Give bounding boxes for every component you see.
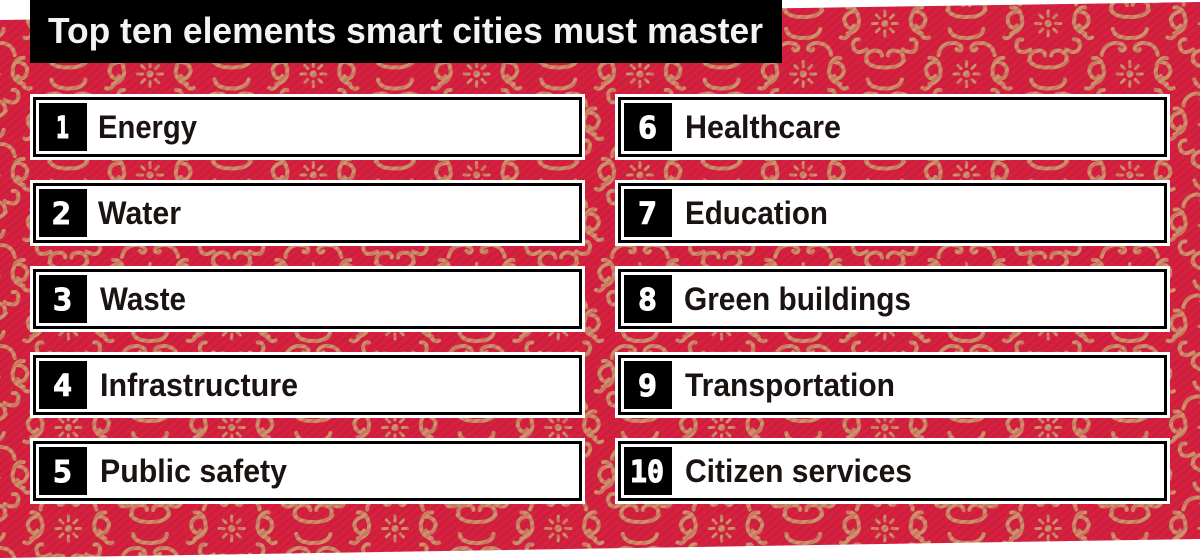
item 2: Water: Water	[98, 195, 181, 231]
item 2: Water: 2	[52, 197, 71, 232]
item 4: Infrastructure: Infrastructure	[100, 367, 298, 403]
title banner: Top ten elements smart cities must master	[48, 10, 763, 51]
item 3: Waste: Waste	[100, 281, 186, 317]
item 1: Energy: 1	[56, 111, 69, 146]
item 3: Waste	[30, 266, 585, 332]
item 8: Green buildings	[615, 266, 1170, 332]
item 4: Infrastructure: 4	[53, 369, 72, 404]
item 2: Water	[30, 180, 585, 246]
item 10: Citizen services	[615, 438, 1170, 504]
item 10: Citizen services: 10	[630, 455, 664, 490]
item 7: Education: Education	[685, 195, 828, 231]
item 4: Infrastructure	[30, 352, 585, 418]
item 10: Citizen services: Citizen services	[685, 453, 912, 489]
item 9: Transportation: 9	[638, 369, 657, 404]
item 6: Healthcare	[615, 94, 1170, 160]
item 6: Healthcare: 6	[638, 111, 657, 146]
item 5: Public safety: 5	[53, 455, 72, 490]
item 8: Green buildings: Green buildings	[684, 281, 911, 317]
item 1: Energy: Energy	[98, 109, 197, 145]
item 5: Public safety	[30, 438, 585, 504]
title banner	[30, 0, 782, 63]
item 5: Public safety: Public safety	[100, 453, 287, 489]
item 9: Transportation: Transportation	[685, 367, 895, 403]
item 3: Waste: 3	[53, 283, 72, 318]
item 7: Education: 7	[638, 197, 657, 232]
item 9: Transportation	[615, 352, 1170, 418]
item 7: Education	[615, 180, 1170, 246]
item 1: Energy	[30, 94, 585, 160]
item 8: Green buildings: 8	[638, 283, 657, 318]
item 6: Healthcare: Healthcare	[685, 109, 841, 145]
